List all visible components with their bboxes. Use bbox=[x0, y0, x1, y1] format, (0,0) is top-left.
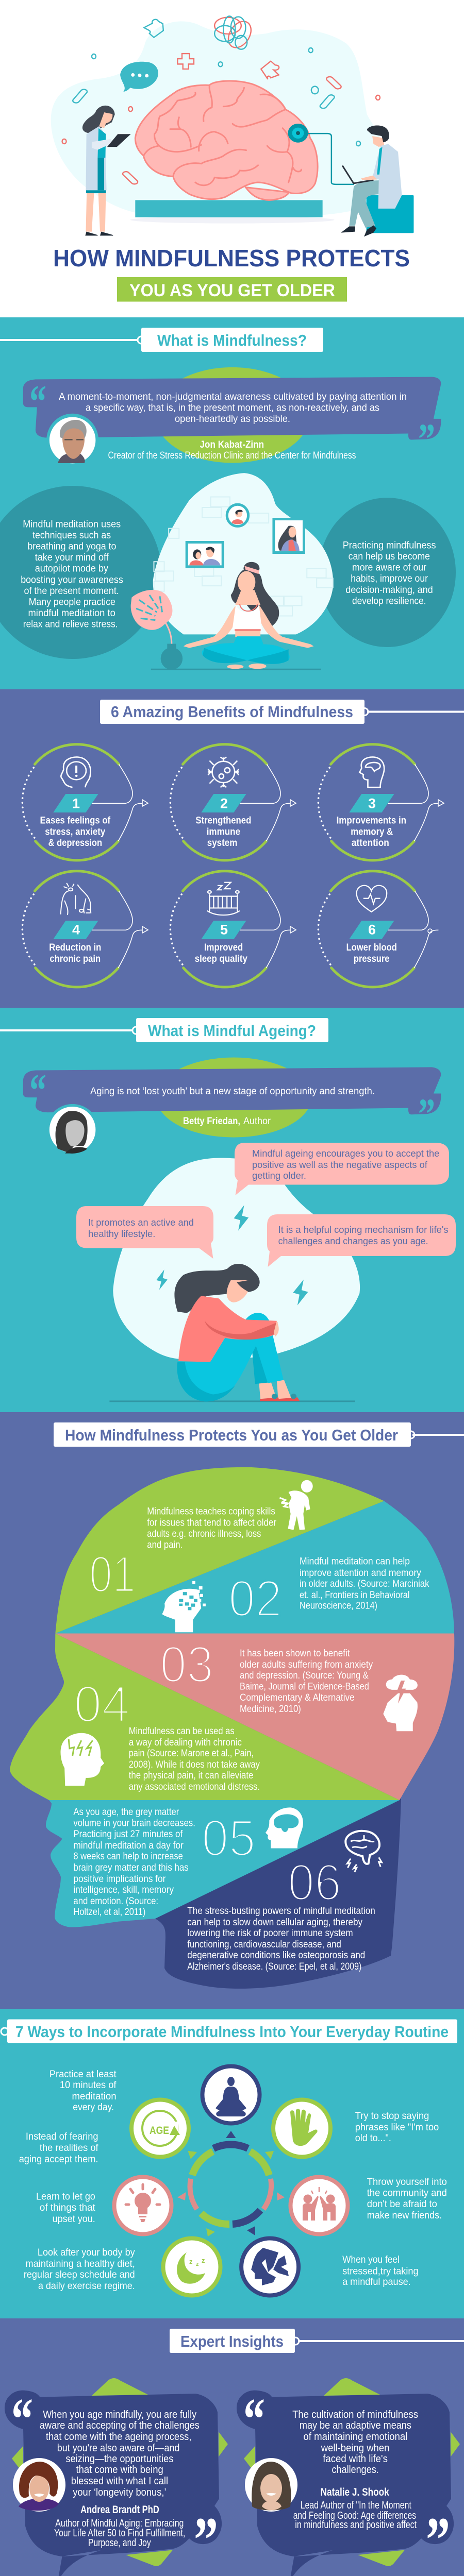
callout: accept positives and negatives bbox=[235, 1143, 449, 1195]
text 05: Holtzel, et al, 2011) bbox=[73, 1907, 145, 1918]
icon: head with brain bbox=[359, 757, 384, 787]
icon: potted plant bbox=[131, 590, 183, 670]
platform bbox=[130, 200, 335, 224]
text 04 bbox=[129, 1726, 260, 1792]
attribution: Author bbox=[243, 1116, 271, 1127]
panel: benefit 2: immune bbox=[207, 827, 240, 838]
text 03: Baime, Journal of Evidence-Based bbox=[240, 1682, 369, 1692]
icon: portrait of Natalie Shook bbox=[245, 2458, 297, 2512]
callout: active lifestyle: healthy lifestyle. bbox=[88, 1229, 155, 1239]
speech bubble bbox=[120, 62, 158, 92]
step: accept ageing: Instead of fearing bbox=[26, 2131, 98, 2142]
quote text: aware and accepting of the challenges bbox=[40, 2420, 200, 2431]
callout: coping mechanism: challenges and changes as you age. bbox=[278, 1236, 428, 1246]
quote text bbox=[40, 2409, 200, 2498]
illustration: woman meditating bbox=[131, 473, 333, 670]
right text: decision-making, and bbox=[345, 585, 433, 596]
callout: accept positives and negatives: Mindful ageing encourages you to accept the bbox=[252, 1148, 439, 1159]
quote text: challenges. bbox=[332, 2464, 379, 2476]
text 04: the physical pain, it can alleviate bbox=[129, 1770, 253, 1781]
slice 03 bbox=[55, 1633, 454, 1800]
text 05 bbox=[73, 1807, 195, 1918]
icon: virus cell bbox=[208, 757, 239, 787]
step: let go bbox=[36, 2177, 171, 2234]
panel: benefit 4: chronic pain bbox=[49, 954, 101, 964]
left text: autopilot mode by bbox=[35, 564, 108, 574]
icon: moon with zzz: z bbox=[189, 2258, 193, 2265]
hero illustration: brain and doctors bbox=[51, 16, 413, 236]
text 02 bbox=[300, 1556, 429, 1612]
icon: portrait of Betty Friedan bbox=[49, 1104, 96, 1154]
text 03: and depression. (Source: Young & bbox=[240, 1670, 369, 1681]
icon: round portrait frame bbox=[227, 504, 248, 526]
right circle bbox=[319, 498, 456, 647]
text 03: It has been shown to benefit bbox=[240, 1648, 350, 1659]
number 06: 06 bbox=[288, 1854, 341, 1911]
text 02: improve attention and memory bbox=[300, 1568, 421, 1579]
left text: of the present moment. bbox=[24, 586, 119, 597]
icon: woman portrait frame bbox=[274, 519, 304, 553]
quote text: The cultivation of mindfulness bbox=[292, 2409, 418, 2420]
icon: moon with zzz: z bbox=[202, 2257, 205, 2264]
step: daily meditation: meditation bbox=[72, 2091, 117, 2102]
marker: end circle bbox=[428, 929, 432, 933]
quote mark close: ” bbox=[418, 1089, 435, 1139]
text 05: Practicing just 27 minutes of bbox=[73, 1829, 183, 1840]
icon: head with alert bbox=[61, 757, 91, 787]
sensor and cable bbox=[288, 124, 354, 184]
step: look after body: regular sleep schedule and bbox=[24, 2269, 135, 2280]
text 04: any associated emotional distress. bbox=[129, 1782, 260, 1792]
doctor with laptop bbox=[341, 125, 413, 236]
step: let go: of things that bbox=[40, 2202, 96, 2213]
right text: develop resilience. bbox=[352, 596, 426, 606]
slice 02 bbox=[55, 1501, 454, 1633]
left text: techniques such as bbox=[32, 530, 111, 541]
text 02: Mindful meditation can help bbox=[300, 1556, 410, 1567]
quote text: faced with life's bbox=[323, 2453, 388, 2465]
panel: benefit 2 bbox=[170, 744, 290, 860]
brain bbox=[135, 81, 318, 200]
quote text: blessed with what I call bbox=[71, 2476, 168, 2487]
heading: What is Mindfulness? bbox=[0, 328, 323, 352]
panel: benefit 6: pressure bbox=[354, 954, 389, 964]
text 05: volume in your brain decreases. bbox=[73, 1818, 195, 1829]
text 04: pain (Source: Marone et al., Pain, bbox=[129, 1748, 254, 1759]
callout: active lifestyle: It promotes an active and bbox=[88, 1217, 194, 1228]
left text: Many people practice bbox=[29, 597, 115, 608]
step: join community: the community and bbox=[367, 2188, 447, 2199]
text 04: 2008). While it does not take away bbox=[129, 1759, 260, 1770]
arrow: benefit 1 to 2 bbox=[142, 800, 148, 806]
icon: light bulb bbox=[114, 2177, 171, 2234]
quote text: well-being when bbox=[321, 2443, 389, 2454]
text 06: lowering the risk of poorer immune system bbox=[187, 1928, 353, 1939]
number 05: 05 bbox=[202, 1809, 256, 1867]
step: daily meditation: every day. bbox=[73, 2102, 114, 2113]
woman figure bbox=[184, 562, 313, 669]
doctor with tablet bbox=[82, 106, 131, 235]
icon: head with storm cloud bbox=[383, 1675, 418, 1731]
quote mark open: “ bbox=[11, 2386, 33, 2452]
expert name: Andrea Brandt PhD bbox=[80, 2504, 159, 2516]
icon: heart with pulse bbox=[357, 886, 387, 912]
subtitle banner: YOU AS YOU GET OLDER bbox=[129, 281, 335, 300]
quote mark open: “ bbox=[29, 376, 46, 427]
step: stop saying too old: phrases like "I'm too bbox=[355, 2122, 439, 2133]
icon: high five bbox=[291, 2177, 347, 2234]
icon: portrait of Jon Kabat-Zinn bbox=[46, 414, 98, 467]
quote text: open-heartedly as possible. bbox=[175, 414, 290, 425]
callout: coping mechanism: It is a helpful coping mechanism for life's bbox=[278, 1225, 449, 1235]
quote mark close: ” bbox=[194, 2505, 218, 2576]
step: look after body: maintaining a healthy diet, bbox=[25, 2259, 135, 2269]
text 02: Neuroscience, 2014) bbox=[300, 1601, 377, 1612]
icon: brain with lightning bbox=[345, 1831, 382, 1872]
right text: can help us become bbox=[349, 551, 430, 562]
callout: accept positives and negatives: positive as well as the negative aspects of bbox=[252, 1160, 428, 1170]
text 01: Mindfulness teaches coping skills bbox=[147, 1506, 275, 1517]
step: accept ageing bbox=[19, 2100, 189, 2165]
panel: benefit 2: system bbox=[207, 838, 237, 849]
step: mindful pause: stressed,try taking bbox=[342, 2266, 419, 2277]
panel: benefit 2: Strengthened bbox=[195, 816, 251, 826]
panel: benefit 3 bbox=[318, 744, 438, 860]
expert name: Natalie J. Shook bbox=[321, 2486, 389, 2498]
right text: more aware of our bbox=[352, 563, 427, 573]
text 05: As you age, the grey matter bbox=[73, 1807, 179, 1818]
step: join community bbox=[291, 2177, 447, 2234]
panel: benefit 1: Eases feelings of bbox=[40, 816, 111, 826]
step: mindful pause: a mindful pause. bbox=[342, 2277, 411, 2287]
panel: benefit 1 bbox=[22, 744, 142, 860]
text 04: Mindfulness can be used as bbox=[129, 1726, 235, 1737]
text 01: and pain. bbox=[147, 1539, 183, 1551]
illustration: woman sitting with head on knees bbox=[109, 1158, 360, 1401]
quote text: Aging is not ‘lost youth’ but a new stage of opportunity and strength. bbox=[90, 1086, 375, 1097]
quote text: A moment-to-moment, non-judgmental awareness cultivated by paying attention in bbox=[59, 392, 407, 402]
heading: How Mindfulness Protects: How Mindfulness Protects You as You Get Older bbox=[65, 1426, 398, 1444]
text 05: 8 weeks can help to increase bbox=[73, 1851, 183, 1862]
arrow: benefit 5 to 6 bbox=[290, 926, 296, 933]
panel: benefit 6: 6 bbox=[368, 922, 376, 938]
diagram: cycle of arcs and arrows bbox=[177, 2131, 285, 2236]
quote text bbox=[59, 392, 407, 425]
expert title: Purpose, and Joy bbox=[88, 2537, 151, 2549]
quote text: that come with being bbox=[76, 2464, 163, 2476]
text 06: can help to slow down cellular aging, thereby bbox=[187, 1917, 363, 1928]
heading: 6 Amazing Benefits bbox=[100, 700, 464, 724]
step: join community: Throw yourself into bbox=[367, 2177, 447, 2188]
heading: What is Mindful Ageing? bbox=[0, 1018, 328, 1042]
quote text: that come with the ageing process, bbox=[46, 2431, 191, 2443]
text 05: positive implications for bbox=[73, 1874, 166, 1885]
heading: 6 Amazing Benefits: 6 Amazing Benefits of Mindfulness bbox=[111, 703, 353, 721]
quote text: When you age mindfully, you are fully bbox=[43, 2409, 196, 2420]
quote text: a specific way, that is, in the present moment, as non-reactively, and as bbox=[86, 403, 379, 413]
text 02: et. al., Frontiers in Behavioral bbox=[300, 1590, 409, 1601]
chart: head divided into six slices bbox=[10, 1467, 454, 1989]
expert title: Author of Mindful Aging: Embracing bbox=[55, 2518, 184, 2529]
panel: Andrea Brandt quote bbox=[5, 2378, 228, 2576]
panel: benefit 2: 2 bbox=[220, 795, 228, 811]
panel: benefit 4: 4 bbox=[72, 922, 80, 938]
icon: AGE cycle: AGE bbox=[150, 2125, 169, 2137]
panel: benefit 4 bbox=[22, 871, 142, 987]
icon: crib with zzz bbox=[207, 883, 240, 915]
text 03: Medicine, 2010) bbox=[240, 1704, 301, 1715]
right text: Practicing mindfulness bbox=[343, 540, 436, 551]
callout: accept positives and negatives: getting older. bbox=[252, 1171, 306, 1181]
text 03: older adults suffering from anxiety bbox=[240, 1659, 373, 1670]
heading: What is Mindfulness?: What is Mindfulness? bbox=[157, 331, 307, 349]
panel: benefit 1: & depression bbox=[48, 838, 102, 849]
quote mark open: “ bbox=[29, 1065, 46, 1116]
quote text bbox=[292, 2409, 418, 2476]
title: HOW MINDFULNESS PROTECTS bbox=[53, 245, 410, 272]
icon: back pain body bbox=[61, 883, 91, 915]
panel: benefit 5: 5 bbox=[220, 922, 228, 938]
icon: head with brain bbox=[266, 1807, 303, 1849]
slice 05 bbox=[46, 1800, 400, 1927]
icon: stressed head bbox=[241, 2238, 299, 2296]
icon: portrait of Andrea Brandt bbox=[13, 2458, 65, 2512]
number 02: 02 bbox=[228, 1570, 282, 1628]
slice 01 bbox=[55, 1467, 384, 1633]
number 01: 01 bbox=[89, 1546, 136, 1603]
step: stop saying too old: old to...". bbox=[355, 2133, 391, 2144]
callout: coping mechanism bbox=[267, 1214, 456, 1267]
text 03: Complementary & Alternative bbox=[240, 1692, 355, 1703]
slice 04 bbox=[10, 1633, 400, 1800]
decorative medical outlines bbox=[62, 16, 380, 185]
expert title bbox=[293, 2500, 417, 2531]
quote text: but you're also aware of—and bbox=[57, 2443, 179, 2454]
quote mark close: ” bbox=[418, 414, 435, 464]
text 01 bbox=[147, 1506, 277, 1551]
step: accept ageing: aging accept them. bbox=[19, 2154, 98, 2165]
text 06: The stress-busting powers of mindful meditation bbox=[187, 1906, 375, 1917]
step: join community: don't be afraid to bbox=[367, 2199, 437, 2210]
arrow: benefit 2 to 3 bbox=[290, 800, 296, 806]
heading: How Mindfulness Protects bbox=[54, 1422, 464, 1447]
panel: benefit 3: 3 bbox=[368, 795, 376, 811]
icon: AGE cycle bbox=[131, 2100, 189, 2157]
panel: benefit 5: sleep quality bbox=[195, 954, 247, 964]
heading: Expert Insights: Expert Insights bbox=[180, 2332, 284, 2350]
number 03: 03 bbox=[160, 1636, 213, 1693]
quote text: of maintaining emotional bbox=[303, 2431, 407, 2443]
text 06: Alzheimer's disease. (Source: Epel, et al, 2009) bbox=[187, 1961, 361, 1972]
text 05: mindful meditation a day for bbox=[73, 1840, 184, 1851]
step: look after body: Look after your body by bbox=[38, 2247, 135, 2258]
icon: moon with zzz bbox=[163, 2238, 221, 2296]
text 01: for issues that tend to affect older bbox=[147, 1518, 277, 1529]
step: stop saying too old: Try to stop saying bbox=[355, 2111, 429, 2122]
step: let go: upset you. bbox=[53, 2214, 95, 2225]
text 05: and emotion. (Source: bbox=[73, 1896, 158, 1907]
quote text: may be an adaptive means bbox=[300, 2420, 411, 2431]
left text: breathing and yoga to bbox=[27, 541, 116, 552]
icon: couple portrait frame bbox=[187, 542, 223, 567]
expert title: Your Life After 50 to Find Fulfillment, bbox=[54, 2528, 185, 2539]
step: mindful pause bbox=[241, 2238, 419, 2296]
right text bbox=[343, 540, 436, 606]
icon: meditation figure bbox=[202, 2066, 260, 2124]
panel: Betty Friedan quote bbox=[23, 1058, 441, 1156]
arrow: benefit 4 to 5 bbox=[142, 926, 148, 933]
step: accept ageing: the realities of bbox=[40, 2143, 98, 2154]
text 01: adults e.g. chronic illness, loss bbox=[147, 1529, 261, 1539]
callout: active lifestyle bbox=[76, 1206, 213, 1259]
quote text: seizing—the opportunities bbox=[65, 2453, 173, 2465]
left text: take your mind off bbox=[35, 552, 109, 563]
left circle bbox=[0, 486, 161, 659]
text 05: intelligence, skill, memory bbox=[73, 1885, 174, 1895]
text 06 bbox=[187, 1906, 375, 1972]
expert title bbox=[54, 2518, 185, 2549]
text 06: degenerative conditions like osteoporosis and bbox=[187, 1950, 365, 1961]
step: mindful pause: When you feel bbox=[342, 2255, 400, 2265]
attribution bbox=[108, 439, 356, 461]
expert title: Lead Author of "In the Moment bbox=[301, 2500, 411, 2511]
attribution: Jon Kabat-Zinn bbox=[200, 439, 264, 450]
step: look after body bbox=[24, 2238, 221, 2296]
panel: benefit 6 bbox=[318, 871, 438, 987]
step: daily meditation bbox=[49, 2066, 260, 2124]
number 04: 04 bbox=[74, 1675, 130, 1733]
heading: Expert Insights bbox=[170, 2329, 464, 2353]
text 02: in older adults. (Source: Marciniak bbox=[300, 1579, 429, 1589]
attribution: Betty Friedan, bbox=[183, 1116, 240, 1127]
step: stop saying too old bbox=[273, 2100, 439, 2157]
arrow: benefit 3 bbox=[438, 800, 444, 806]
quote mark close: ” bbox=[426, 2505, 450, 2576]
step: join community: make new friends. bbox=[367, 2210, 442, 2221]
icon: head dissolving into pixels bbox=[162, 1581, 206, 1632]
panel: benefit 3: memory & bbox=[351, 827, 393, 838]
panel: Natalie Shook quote bbox=[237, 2378, 460, 2576]
text 03 bbox=[240, 1648, 373, 1715]
step: let go: Learn to let go bbox=[36, 2192, 95, 2202]
panel: benefit 5: Improved bbox=[204, 942, 243, 953]
left text: relax and relieve stress. bbox=[23, 619, 118, 630]
text 04: a way of dealing with chronic bbox=[129, 1737, 242, 1748]
panel: benefit 4: Reduction in bbox=[49, 942, 101, 953]
icon: head with bolts bbox=[61, 1733, 104, 1786]
left text: mindful meditation to bbox=[28, 608, 115, 619]
left text bbox=[21, 519, 123, 630]
panel: benefit 6: Lower blood bbox=[346, 942, 397, 953]
text 05: brain grey matter and this has bbox=[73, 1862, 189, 1873]
expert title: and Feeling Good: Age differences bbox=[293, 2510, 416, 2521]
expert title: in mindfulness and positive affect bbox=[295, 2519, 417, 2531]
panel: Kabat-Zinn quote bbox=[23, 367, 441, 467]
right text: habits, improve our bbox=[351, 573, 428, 584]
step: look after body: a daily exercise regime. bbox=[38, 2281, 135, 2292]
step: daily meditation: 10 minutes of bbox=[60, 2080, 117, 2091]
step: daily meditation: Practice at least bbox=[49, 2069, 117, 2080]
text 06: functioning, cardiovascular disease, and bbox=[187, 1939, 341, 1950]
panel: benefit 1: 1 bbox=[72, 795, 80, 811]
attribution: Creator of the Stress Reduction Clinic and the Center for Mindfulness bbox=[108, 450, 356, 461]
slice 06 bbox=[155, 1798, 401, 1989]
icon: raised hand bbox=[273, 2100, 330, 2157]
left text: Mindful meditation uses bbox=[23, 519, 121, 530]
left text: boosting your awareness bbox=[21, 574, 123, 585]
icon: person with back pain bbox=[279, 1480, 313, 1530]
heading: What is Mindful Ageing?: What is Mindful Ageing? bbox=[148, 1022, 316, 1040]
panel: benefit 3: attention bbox=[352, 838, 389, 849]
panel: benefit 1: stress, anxiety bbox=[45, 827, 106, 838]
panel: benefit 5 bbox=[170, 871, 290, 987]
panel: benefit 3: Improvements in bbox=[337, 816, 406, 826]
quote mark open: “ bbox=[243, 2386, 265, 2452]
icon: moon with zzz: z bbox=[196, 2261, 199, 2267]
panel: meditation circles and illustration bbox=[0, 473, 456, 670]
quote text: your ‘longevity bonus,’ bbox=[73, 2487, 167, 2498]
